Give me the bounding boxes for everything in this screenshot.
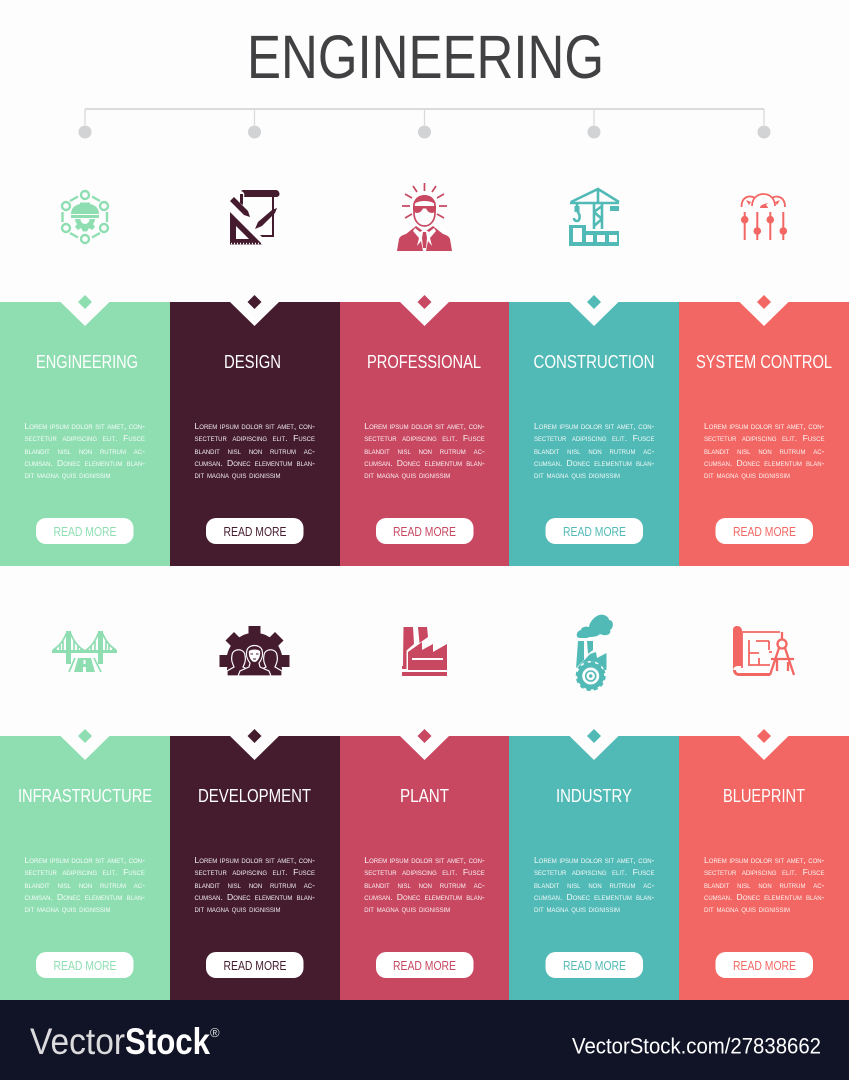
panel: design: [170, 295, 340, 566]
panel: construction: [509, 295, 679, 566]
panel: plant: blandit nisl non rutrum ac-: [364, 880, 485, 890]
icon: helmet and gear network: [60, 190, 110, 244]
panel: development: cumsan. Donec elementum blan-: [194, 892, 315, 902]
icon: professional in sunglasses: [397, 183, 452, 251]
panel: engineering: Lorem ipsum dolor sit amet, con-: [24, 421, 145, 431]
panel: infrastructure: Lorem ipsum dolor sit amet, con-: [24, 855, 145, 865]
footer banner: [0, 1000, 849, 1080]
panel: blueprint: Lorem ipsum dolor sit amet, con-: [704, 855, 824, 865]
panel: design: blandit nisl non rutrum ac-: [194, 446, 315, 456]
logo: VectorStock: [30, 1021, 220, 1062]
panel: design: cumsan. Donec elementum blan-: [194, 458, 315, 468]
panel: infrastructure: dit magna quis dignissim: [24, 904, 110, 914]
icon: suspension bridge and road: [52, 631, 117, 672]
icon: team inside gear: [220, 626, 290, 676]
panel: blueprint: cumsan. Donec elementum blan-: [704, 892, 824, 902]
panel: engineering: sectetur adipiscing elit. Fusce: [24, 433, 145, 443]
panel: plant: Lorem ipsum dolor sit amet, con-: [364, 855, 485, 865]
icon: gauges and sliders: [740, 193, 788, 240]
panel: system control: READ MORE: [733, 525, 796, 539]
panel: system control: blandit nisl non rutrum ac-: [704, 446, 824, 456]
panel: development: dit magna quis dignissim: [194, 904, 280, 914]
panel: development: Lorem ipsum dolor sit amet, con-: [194, 855, 315, 865]
panel: professional: PROFESSIONAL: [367, 352, 481, 372]
panel: construction: Lorem ipsum dolor sit amet, con-: [534, 421, 654, 431]
panel: development: [170, 729, 340, 1000]
panel: infrastructure: READ MORE: [54, 959, 116, 973]
panel: industry: cumsan. Donec elementum blan-: [534, 892, 654, 902]
panel: infrastructure: [0, 729, 170, 1000]
panel: blueprint: BLUEPRINT: [723, 786, 805, 806]
panel: plant: dit magna quis dignissim: [364, 904, 450, 914]
panel: professional: dit magna quis dignissim: [364, 470, 450, 480]
panel: professional: [340, 295, 509, 566]
panel: engineering: blandit nisl non rutrum ac-: [24, 446, 145, 456]
panel: industry: [509, 729, 679, 1000]
panel: design: READ MORE: [224, 525, 286, 539]
panel: industry: Lorem ipsum dolor sit amet, con-: [534, 855, 654, 865]
panel: industry: sectetur adipiscing elit. Fusce: [534, 867, 654, 877]
panel: construction: READ MORE: [563, 525, 626, 539]
panel: design: Lorem ipsum dolor sit amet, con-: [194, 421, 315, 431]
panel: infrastructure: INFRASTRUCTURE: [18, 786, 152, 806]
panel: construction: blandit nisl non rutrum ac-: [534, 446, 654, 456]
logo: VectorStock: Vector: [30, 1021, 125, 1062]
icon: blueprint and compass: [733, 626, 795, 676]
panel: engineering: cumsan. Donec elementum blan-: [24, 458, 145, 468]
panel: industry: dit magna quis dignissim: [534, 904, 620, 914]
panel: blueprint: blandit nisl non rutrum ac-: [704, 880, 824, 890]
panel: development: sectetur adipiscing elit. Fusce: [194, 867, 315, 877]
icon: drawing tools and paper: [230, 190, 280, 244]
panel: system control: Lorem ipsum dolor sit amet, con-: [704, 421, 824, 431]
panel: development: DEVELOPMENT: [198, 786, 311, 806]
icon: construction crane and building: [569, 188, 620, 246]
panel: professional: sectetur adipiscing elit. Fusce: [364, 433, 485, 443]
logo: VectorStock: Stock: [125, 1021, 210, 1062]
timeline connector with five dots: [78, 108, 770, 138]
logo: VectorStock: ®: [210, 1025, 220, 1040]
panel: infrastructure: blandit nisl non rutrum ac-: [24, 880, 145, 890]
icon: industry smoke and gear: [576, 614, 613, 691]
icon: factory: [402, 627, 447, 676]
panel: professional: blandit nisl non rutrum ac-: [364, 446, 485, 456]
panel: system control: dit magna quis dignissim: [704, 470, 790, 480]
panel: design: DESIGN: [224, 352, 281, 372]
panel: industry: READ MORE: [563, 959, 626, 973]
panel: system control: sectetur adipiscing elit. Fusce: [704, 433, 824, 443]
panel: plant: PLANT: [400, 786, 449, 806]
panel: professional: Lorem ipsum dolor sit amet, con-: [364, 421, 485, 431]
panel: industry: INDUSTRY: [556, 786, 632, 806]
panel: plant: cumsan. Donec elementum blan-: [364, 892, 485, 902]
panel: plant: READ MORE: [393, 959, 456, 973]
panel: construction: cumsan. Donec elementum blan-: [534, 458, 654, 468]
panel: engineering: dit magna quis dignissim: [24, 470, 110, 480]
panel: blueprint: [679, 729, 849, 1000]
panel: industry: blandit nisl non rutrum ac-: [534, 880, 654, 890]
panel: construction: dit magna quis dignissim: [534, 470, 620, 480]
panel: engineering: ENGINEERING: [36, 352, 138, 372]
panel: professional: READ MORE: [393, 525, 456, 539]
panel: plant: sectetur adipiscing elit. Fusce: [364, 867, 485, 877]
panel: design: dit magna quis dignissim: [194, 470, 280, 480]
panel: plant: [340, 729, 509, 1000]
panel: infrastructure: sectetur adipiscing elit. Fusce: [24, 867, 145, 877]
panel: blueprint: sectetur adipiscing elit. Fusce: [704, 867, 824, 877]
panel: infrastructure: cumsan. Donec elementum blan-: [24, 892, 145, 902]
panel: professional: cumsan. Donec elementum blan-: [364, 458, 485, 468]
panel: blueprint: READ MORE: [733, 959, 796, 973]
panel: engineering: READ MORE: [54, 525, 116, 539]
panel: system control: [679, 295, 849, 566]
panel: construction: sectetur adipiscing elit. Fusce: [534, 433, 654, 443]
panel: engineering: [0, 295, 170, 566]
title: ENGINEERING: [247, 23, 604, 91]
panel: development: READ MORE: [224, 959, 286, 973]
panel: design: sectetur adipiscing elit. Fusce: [194, 433, 315, 443]
panel: blueprint: dit magna quis dignissim: [704, 904, 790, 914]
panel: development: blandit nisl non rutrum ac-: [194, 880, 315, 890]
image id url: VectorStock.com/27838662: [572, 1034, 821, 1058]
panel: system control: cumsan. Donec elementum blan-: [704, 458, 824, 468]
panel: construction: CONSTRUCTION: [534, 352, 654, 372]
